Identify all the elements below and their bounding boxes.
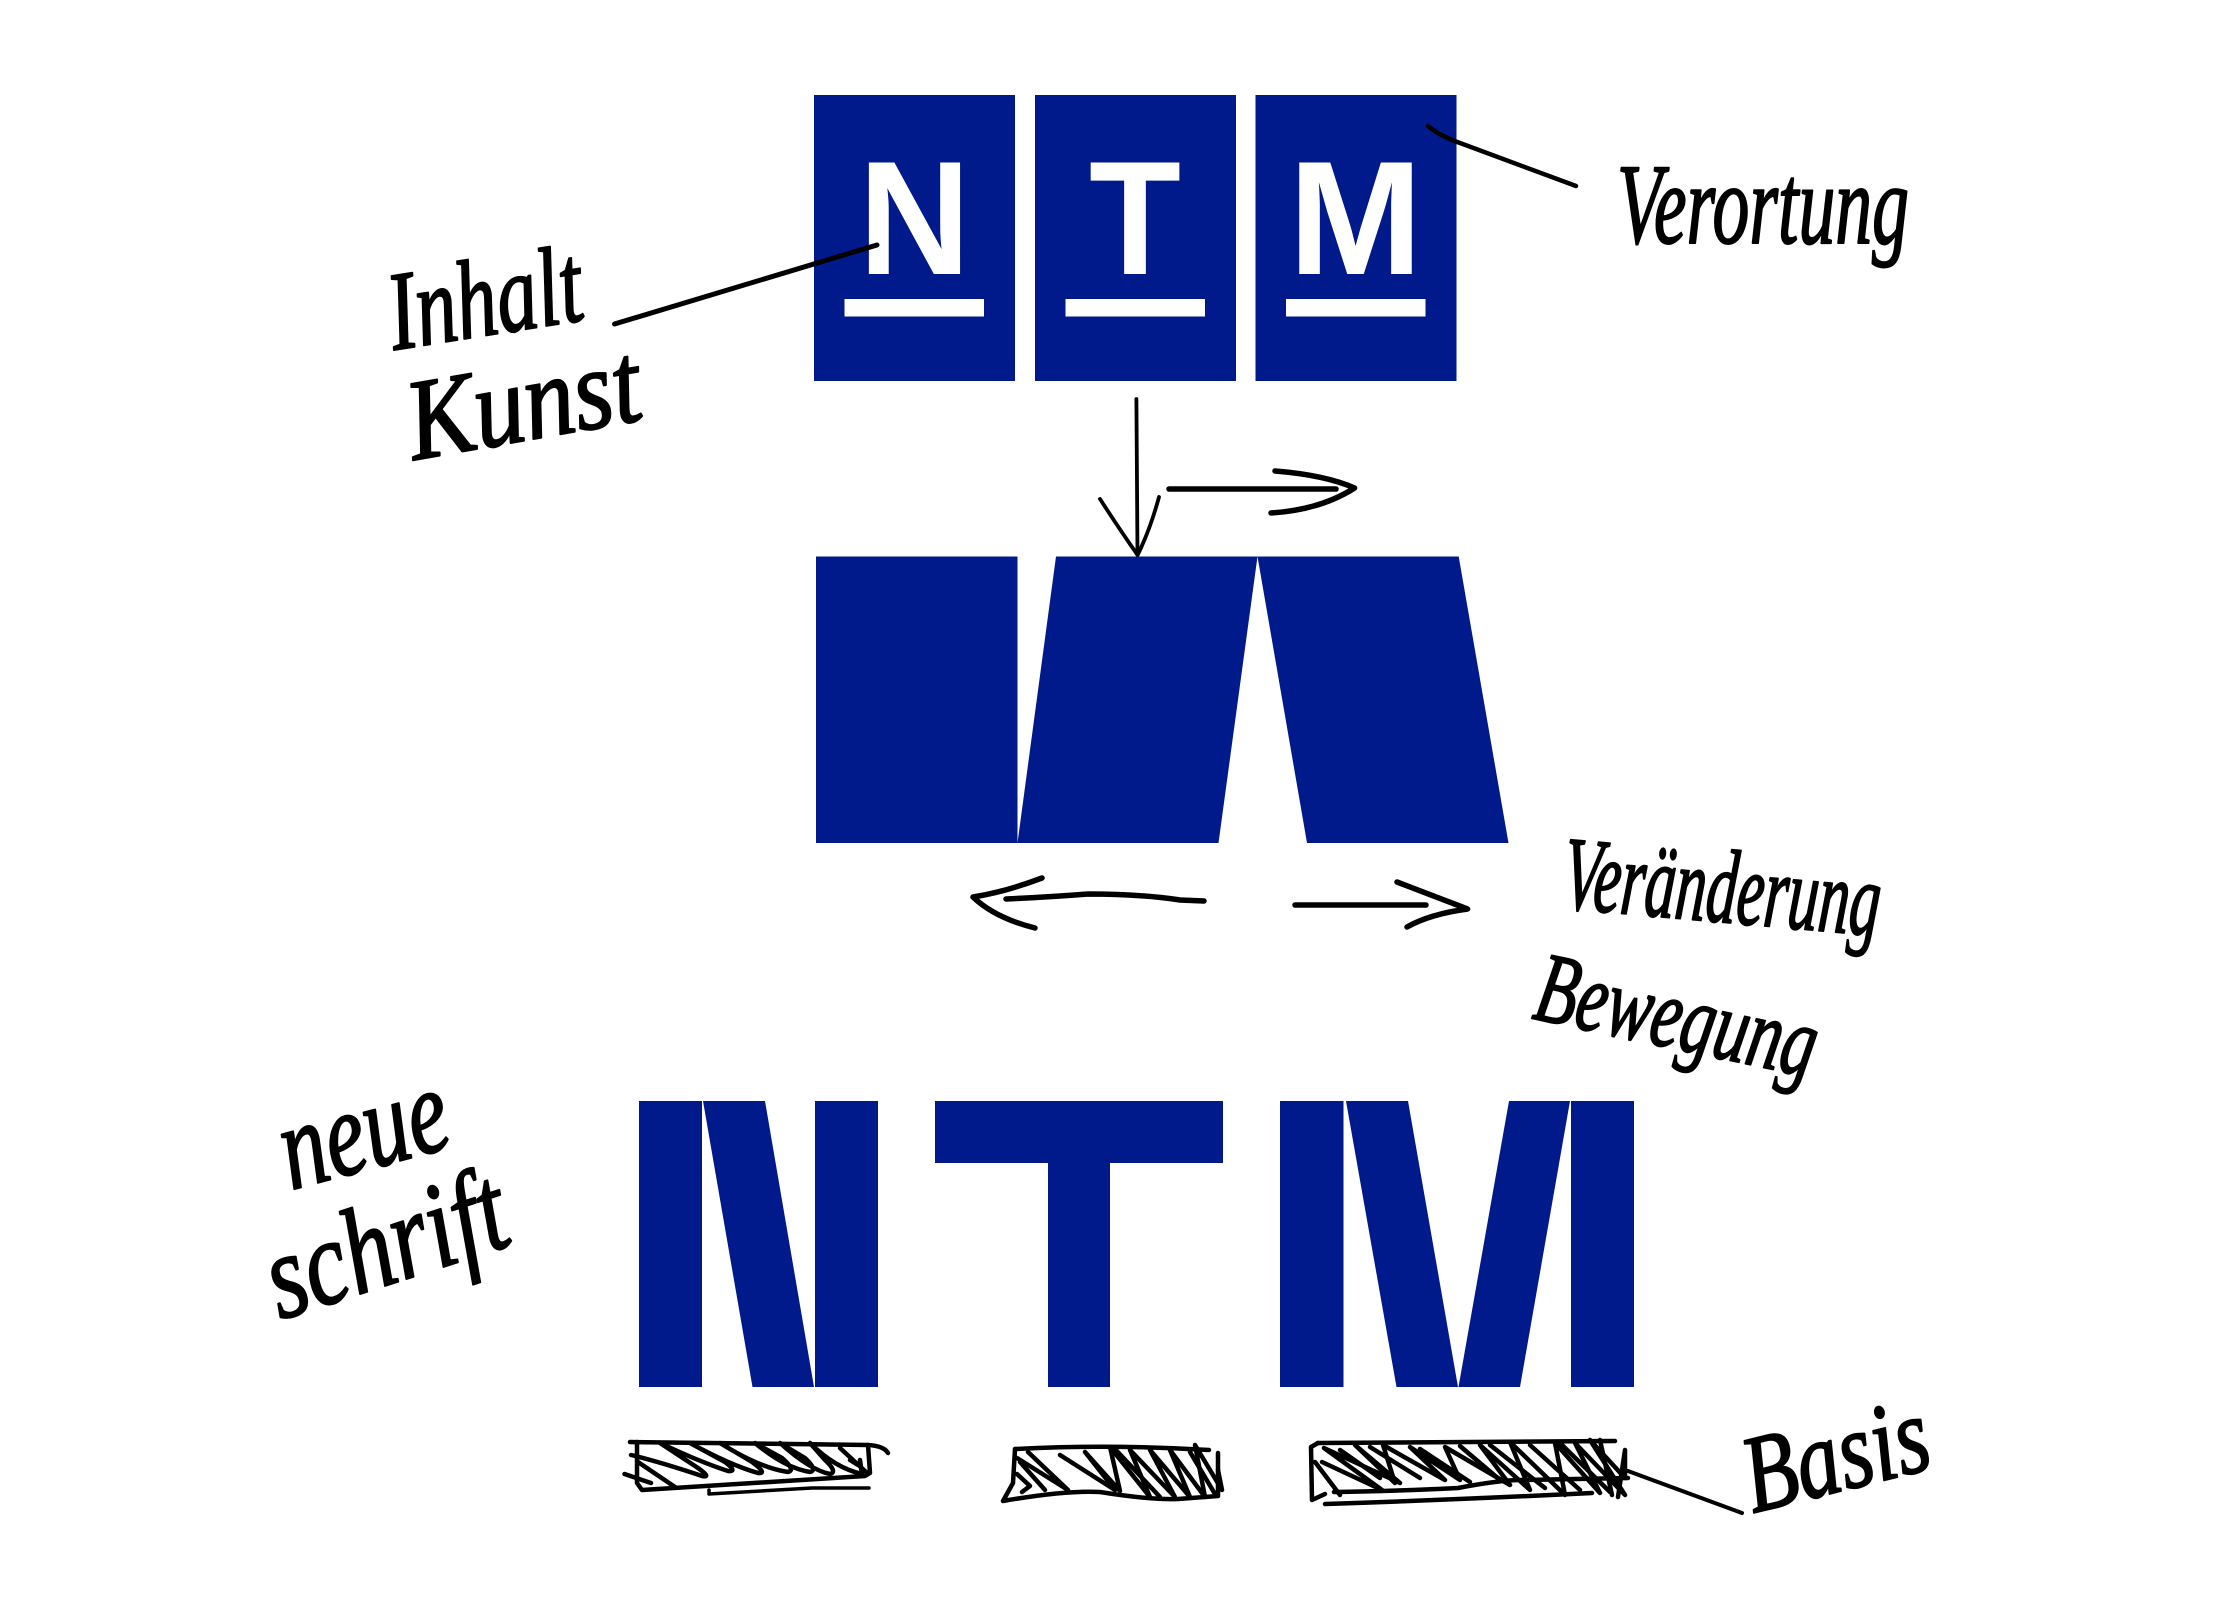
leader line: Inhalt to N (614, 245, 877, 324)
arrow: right movement (1295, 882, 1468, 927)
arrow: left movement (973, 878, 1204, 928)
panel: new NTM lettering (639, 1101, 1634, 1387)
handwritten label: Inhalt: Inhalt (378, 221, 593, 375)
module right (1258, 556, 1508, 843)
module middle (1018, 556, 1258, 843)
arrow: down (1100, 399, 1159, 555)
panel: NTM logo boxes (814, 95, 1456, 381)
handwritten label: Verortung: Verortung (1617, 141, 1909, 268)
handwritten label: Basis: Basis (1729, 1372, 1941, 1536)
box T: T (1089, 128, 1181, 309)
hatched base: M (1311, 1440, 1628, 1504)
box M (1256, 95, 1456, 381)
handwritten label: Bewegung: Bewegung (1526, 931, 1828, 1099)
leader line: Verortung to M (1428, 126, 1576, 186)
handwritten label: Kunst: Kunst (395, 318, 652, 485)
box N: N (858, 128, 970, 309)
letterform N (639, 1101, 878, 1387)
leader line: base to Basis (1628, 1471, 1742, 1513)
box N (814, 95, 1015, 381)
hatched base: T (1003, 1445, 1222, 1501)
handwritten label: Veränderung: Veränderung (1559, 814, 1886, 959)
module left (816, 556, 1018, 843)
hatched base: N (624, 1442, 888, 1494)
letterform T (935, 1101, 1223, 1387)
box T (1035, 95, 1236, 381)
handwritten label: neue: neue (263, 1042, 462, 1216)
arrow: right (1169, 471, 1355, 513)
box M: M (1288, 128, 1422, 309)
panel: trapezoid transformation (816, 556, 1508, 843)
handwritten label: schrift: schrift (247, 1140, 526, 1346)
letterform M (1280, 1101, 1634, 1387)
